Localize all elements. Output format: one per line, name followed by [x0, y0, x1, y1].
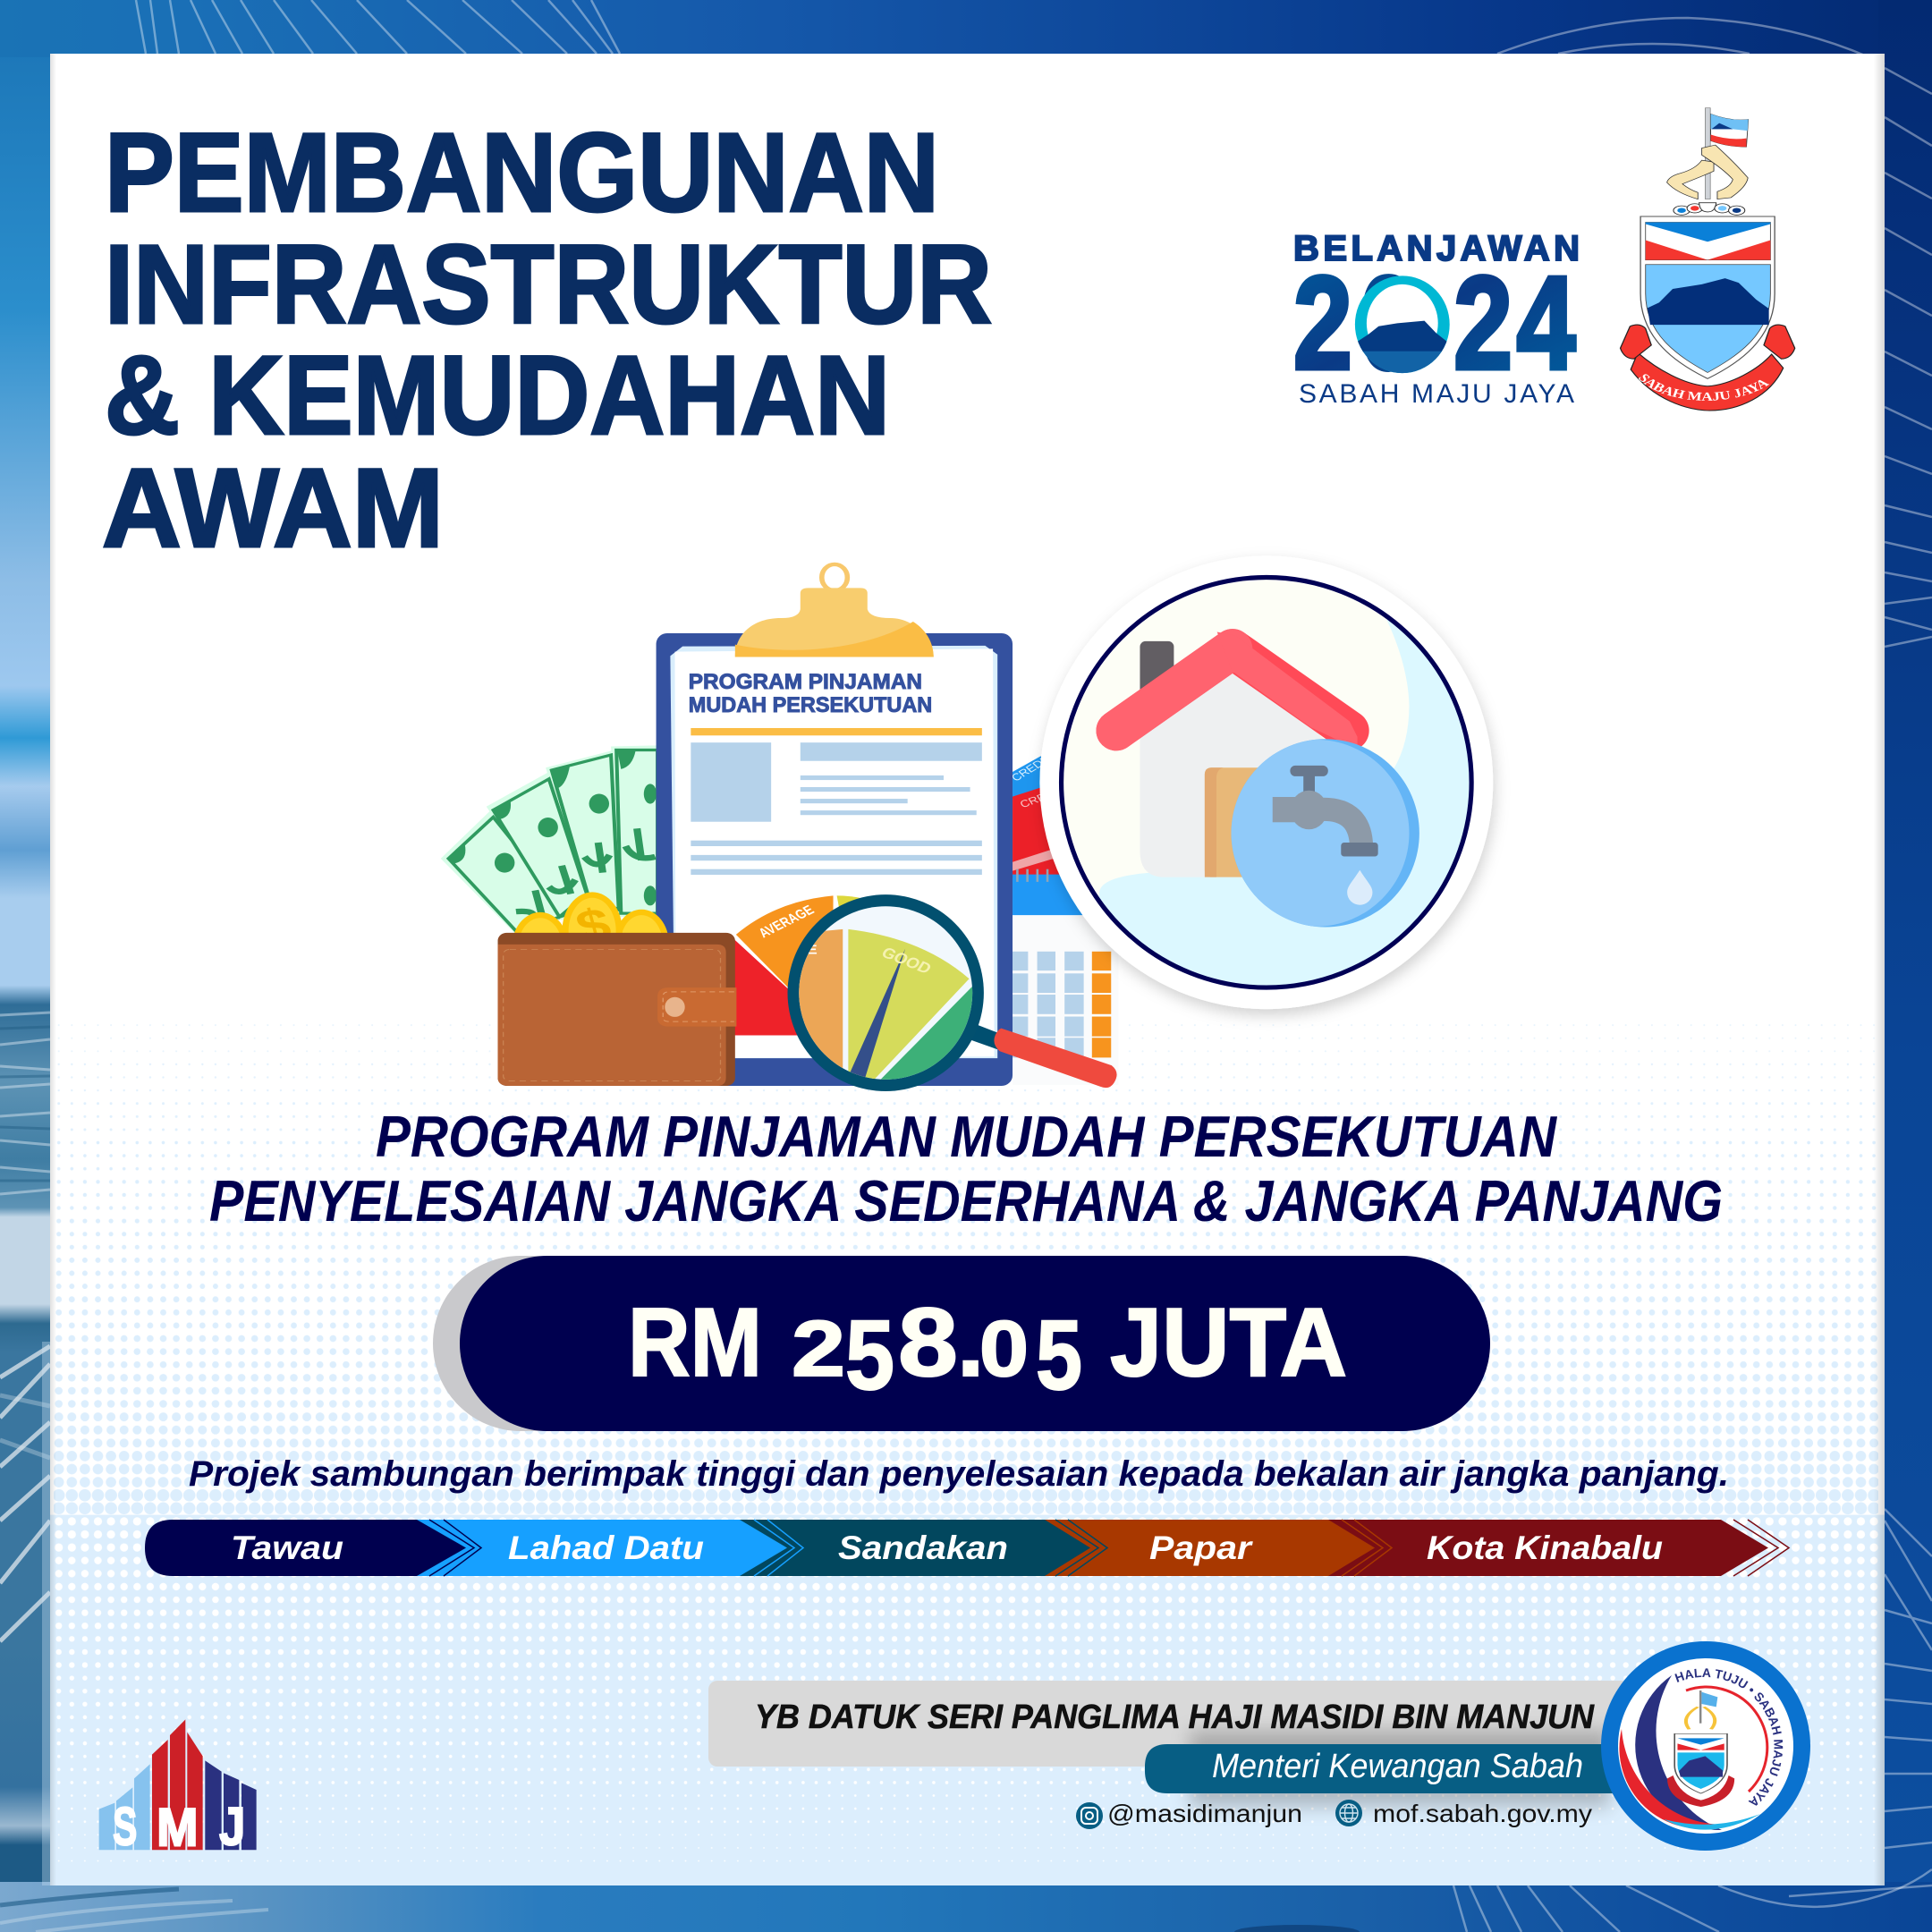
icon: credit cards: CREDIT [1018, 784, 1067, 810]
icon: wallet with coins: $ [626, 934, 650, 970]
ribbon: five district arrows: Lahad Datu [508, 1530, 704, 1566]
social handles: mof.sabah.gov.my [1373, 1800, 1592, 1827]
ribbon: five district arrows: Kota Kinabalu [1427, 1530, 1663, 1566]
callout: amount pill: . [957, 1288, 984, 1397]
icon: magnifying glass [785, 894, 1117, 1091]
clipboard heading text [689, 669, 932, 716]
callout: amount pill: RM [628, 1288, 762, 1397]
icon: calendar [1013, 869, 1118, 1085]
gauge chart: AVERAGE [755, 902, 818, 941]
icon: house and water tap in circle [1039, 555, 1493, 1009]
callout: amount pill: 5 [1036, 1301, 1082, 1411]
icon: raised arms [1667, 145, 1748, 199]
logo: Belanjawan 2024: 2024 [1293, 250, 1575, 397]
heading: programme name: PENYELESAIAN JANGKA SEDERHANA & JANGKA PANJANG [209, 1168, 1723, 1233]
minister role: Menteri Kewangan Sabah [1212, 1748, 1583, 1785]
title: & KEMUDAHAN [105, 334, 890, 458]
title [102, 111, 992, 571]
title: INFRASTRUKTUR [105, 223, 992, 347]
document lines [691, 728, 982, 875]
tap [1223, 739, 1419, 928]
ribbon: five district arrows: Sandakan [838, 1530, 1008, 1566]
title: PEMBANGUNAN [105, 111, 939, 235]
logo: SMJ: M [157, 1797, 199, 1857]
clipboard heading text: MUDAH PERSEKUTUAN [689, 691, 932, 716]
badge: Hala Tuju seal [1601, 1641, 1810, 1851]
gauge chart [733, 895, 886, 1035]
icon: instagram [1076, 1802, 1103, 1829]
icon: motto ribbon [1619, 324, 1796, 411]
icon: mini coat of arms [1667, 1690, 1734, 1807]
icon: credit cards: CREDIT [1008, 751, 1055, 784]
ribbon: five district arrows [145, 1520, 1789, 1576]
icon: magnifying glass: GOOD [878, 945, 935, 978]
icon: wallet with coins: $ [570, 897, 616, 953]
illustration: loan programme clipboard, wallet and gauge [441, 564, 1118, 1091]
icon: wallet with coins [498, 892, 736, 1086]
logo: SMJ: J [219, 1797, 245, 1857]
logo: Belanjawan 2024: SABAH MAJU JAYA [1299, 379, 1574, 409]
icon: credit cards [1008, 751, 1068, 878]
icon: flag and pole [1706, 108, 1749, 199]
clipboard board and paper [657, 633, 1013, 1086]
icon: crown beads [1674, 203, 1745, 215]
social handles: @masidimanjun [1107, 1800, 1302, 1827]
callout: amount pill [433, 1256, 1490, 1431]
text: project summary: Projek sambungan berimpak tinggi dan penyelesaian kepada bekalan air jangka panjang. [189, 1454, 1729, 1494]
ribbon: five district arrows: Tawau [231, 1530, 343, 1566]
icon: banknotes [441, 745, 657, 935]
minister role [1145, 1744, 1637, 1793]
icon: motto ribbon: SABAH MAJU JAYA [1639, 374, 1769, 401]
icon: shield [1640, 216, 1775, 378]
panel: minister name plate [708, 1681, 1637, 1807]
heading: programme name: PROGRAM PINJAMAN MUDAH PERSEKUTUAN [376, 1104, 1558, 1169]
panel: minister name plate: YB DATUK SERI PANGLIMA HAJI MASIDI BIN MANJUN [755, 1699, 1595, 1736]
callout: amount pill: 0 [979, 1304, 1029, 1393]
icon: magnifying glass: E [806, 942, 818, 957]
logo: SMJ [99, 1719, 257, 1857]
icon: globe [1335, 1800, 1362, 1826]
logo: SMJ: S [113, 1797, 137, 1857]
social handles [1076, 1800, 1592, 1829]
badge: Hala Tuju seal: HALA TUJU • SABAH MAJU JAYA [1674, 1668, 1784, 1806]
clipboard clip [735, 564, 934, 657]
house [1116, 632, 1358, 877]
clipboard heading text: PROGRAM PINJAMAN [689, 669, 922, 693]
ribbon: five district arrows: Papar [1149, 1530, 1254, 1566]
callout: amount pill: 5 [845, 1301, 894, 1411]
callout: amount pill: 2 [792, 1304, 845, 1393]
logo: Sabah coat of arms [1619, 107, 1796, 411]
heading: programme name [209, 1104, 1723, 1233]
callout: amount pill: 8 [898, 1288, 958, 1397]
title: AWAM [102, 446, 444, 571]
logo: Belanjawan 2024: BELANJAWAN [1293, 229, 1580, 268]
icon: wallet with coins: $ [524, 934, 547, 970]
callout: amount pill: JUTA [1110, 1288, 1347, 1397]
